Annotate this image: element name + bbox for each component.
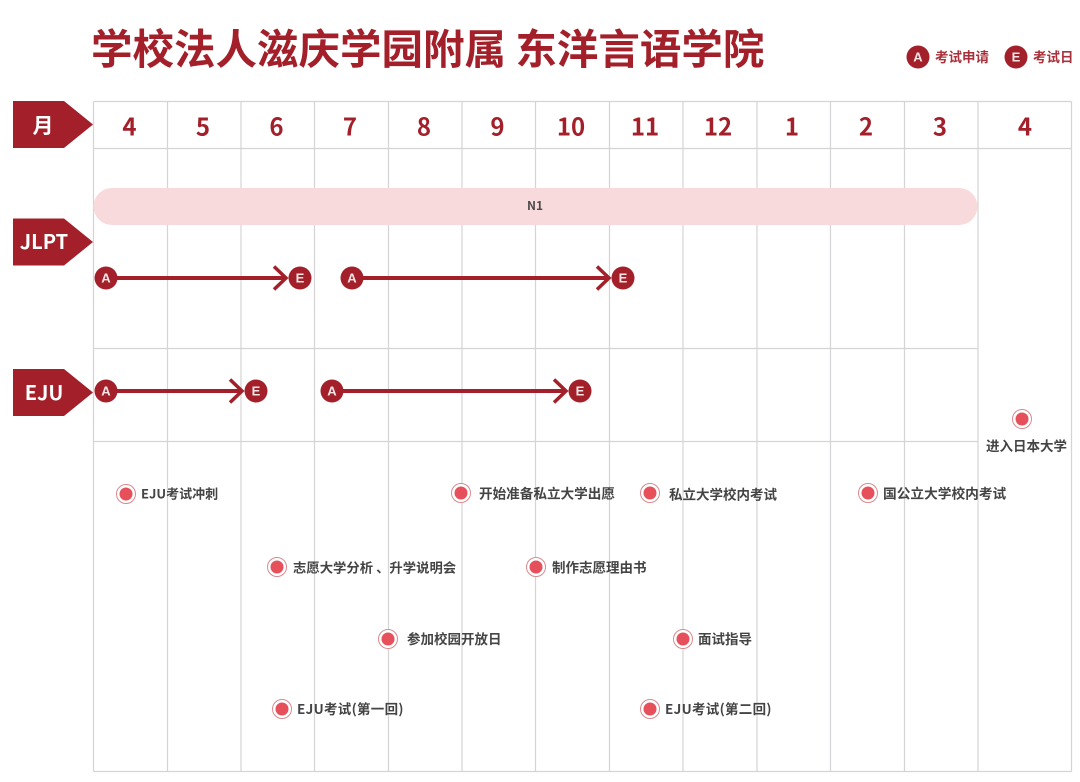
EJU arrow: first session <box>94 380 268 402</box>
row label: JLPT: JLPT <box>20 226 68 255</box>
milestone: EJU exam first session: EJU考试(第一回) <box>297 698 404 718</box>
legend <box>906 46 1074 68</box>
milestone: enter Japanese university <box>986 410 1067 455</box>
legend: application date <box>906 46 989 68</box>
legend: application date: A <box>913 50 923 64</box>
EJU arrow: second session: A <box>327 384 337 398</box>
milestone: interview coaching <box>674 628 752 648</box>
month header: 9 <box>490 108 505 142</box>
row label: month: 月 <box>32 110 54 140</box>
N1 bar: N1 <box>527 197 543 214</box>
milestone: EJU sprint: EJU考试冲刺 <box>141 484 218 502</box>
month header: 12 <box>704 108 732 142</box>
milestone: interview coaching: 面试指导 <box>698 628 752 648</box>
row label: JLPT <box>13 218 93 266</box>
legend: exam date: E <box>1012 50 1021 64</box>
row label: EJU <box>13 369 93 416</box>
month header: 7 <box>343 108 357 142</box>
JLPT arrow: second session: A <box>347 270 357 286</box>
month header: 4 <box>1018 108 1032 142</box>
EJU arrow: first session: A <box>101 384 111 398</box>
month header <box>122 108 1032 142</box>
legend: exam date <box>1004 46 1074 68</box>
legend: application date: 考试申请 <box>935 46 989 66</box>
calendar grid <box>94 102 1072 772</box>
JLPT arrow: first session: E <box>296 270 305 286</box>
milestone: start private university applications: 开始准备私立大学出愿 <box>479 482 615 502</box>
milestone: statement of purpose: 制作志愿理由书 <box>552 556 647 576</box>
month header: 3 <box>933 108 947 142</box>
month header: 4 <box>122 108 137 142</box>
month header: 6 <box>269 108 284 142</box>
milestone: enter Japanese university: 进入日本大学 <box>986 435 1067 455</box>
JLPT arrow: second session: E <box>619 270 628 286</box>
month header: 10 <box>557 108 585 142</box>
row label: month <box>13 101 93 148</box>
milestone: private university exam: 私立大学校内考试 <box>669 484 777 504</box>
N1 bar <box>94 188 978 225</box>
milestone: EJU exam second session: EJU考试(第二回) <box>665 698 772 718</box>
title: 学校法人滋庆学园附属 东洋言语学院 <box>91 16 764 76</box>
EJU arrow: first session: E <box>252 384 261 398</box>
EJU arrow: second session: E <box>576 384 585 398</box>
month header: 8 <box>417 108 431 142</box>
row label: EJU: EJU <box>25 377 63 406</box>
milestone: university analysis and briefing: 志愿大学分析 、升学说明会 <box>293 558 457 576</box>
month header: 1 <box>785 108 799 142</box>
month header: 5 <box>196 108 210 142</box>
EJU arrow: second session <box>320 380 592 402</box>
JLPT arrow: second session <box>340 266 634 290</box>
month header: 2 <box>859 108 873 142</box>
milestone: campus open day: 参加校园开放日 <box>407 628 502 648</box>
month header: 11 <box>631 108 659 142</box>
milestone: national university exam: 国公立大学校内考试 <box>883 482 1007 502</box>
JLPT arrow: first session <box>94 266 312 290</box>
legend: exam date: 考试日 <box>1033 46 1074 66</box>
JLPT arrow: first session: A <box>101 270 111 286</box>
